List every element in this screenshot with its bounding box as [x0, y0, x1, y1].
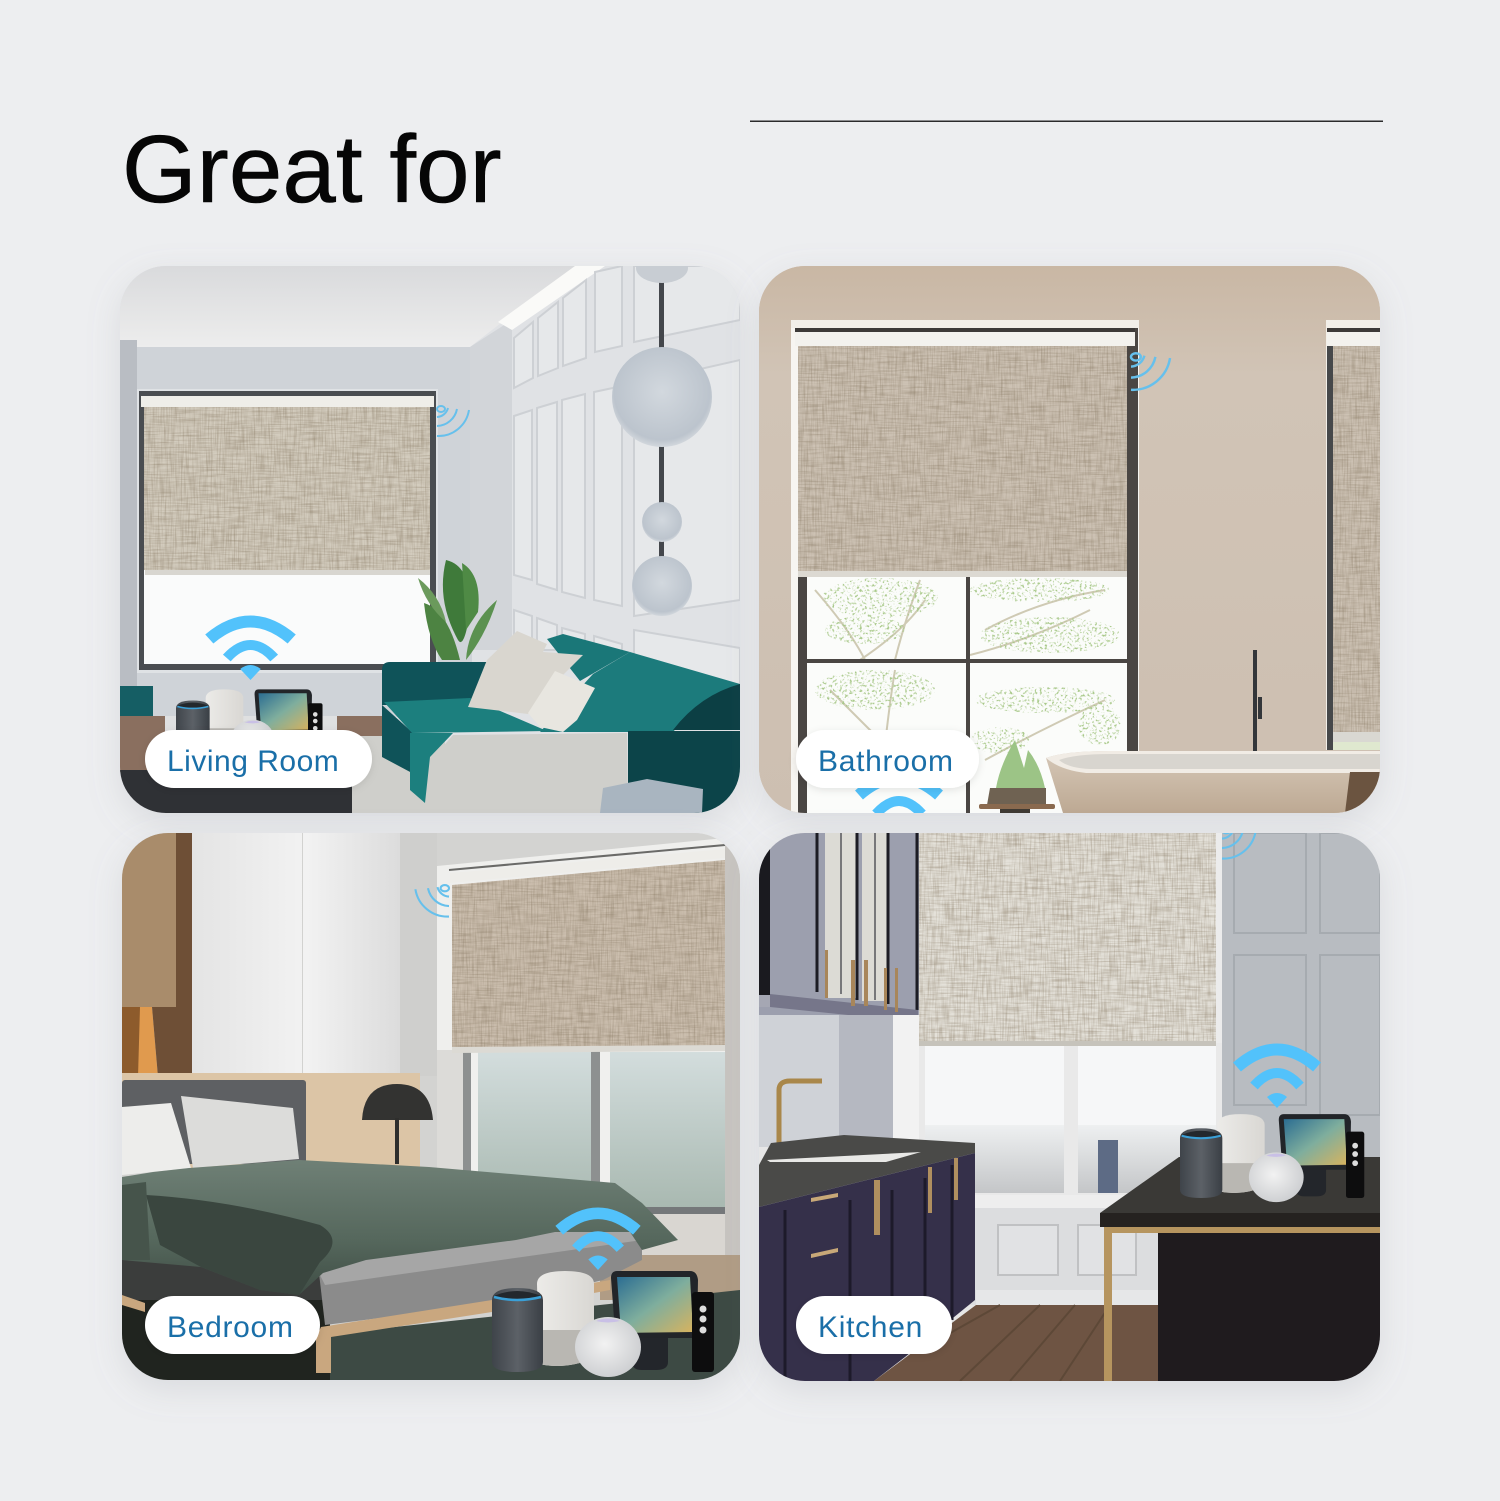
cushions and throw — [445, 631, 628, 813]
panel: kitchen — [759, 827, 1380, 1381]
books — [600, 779, 703, 813]
pendant lamp — [612, 253, 712, 616]
wifi behind label — [855, 788, 943, 813]
island table — [1100, 1157, 1380, 1381]
icon: smart devices — [492, 1271, 714, 1377]
window with shade — [791, 320, 1139, 836]
lower cabinets and counter — [759, 1135, 975, 1381]
icon: wifi — [209, 622, 292, 680]
wall — [759, 266, 1380, 813]
pillows — [122, 1096, 299, 1175]
floor and table — [120, 686, 445, 813]
headboard wall panel — [122, 1073, 420, 1168]
faucet — [779, 1081, 822, 1157]
tree foliage — [815, 578, 1122, 757]
icon: signal arcs — [437, 406, 469, 436]
panel: living room — [120, 253, 740, 813]
panel: bathroom — [759, 266, 1380, 836]
window with shade — [919, 833, 1222, 1195]
plant — [418, 560, 497, 660]
icon: signal arcs — [1222, 833, 1256, 860]
title: Great for — [122, 116, 502, 223]
label: Living Room — [145, 730, 372, 788]
window with shade — [137, 389, 438, 673]
room walls and ceiling — [120, 266, 740, 813]
lamp — [362, 1084, 433, 1164]
upper cabinets — [759, 833, 919, 1015]
label: Bathroom: Bathroom — [818, 745, 954, 778]
label: Bedroom: Bedroom — [167, 1311, 294, 1344]
icon: smart devices — [1180, 1114, 1364, 1202]
label: Bathroom — [796, 730, 979, 788]
floor and rug — [122, 1255, 740, 1380]
label: Kitchen — [796, 1296, 952, 1354]
icon: signal arcs — [415, 885, 449, 917]
bed — [122, 1225, 642, 1373]
tree branches — [815, 580, 1105, 760]
faucet — [1253, 650, 1262, 752]
wooden floor — [874, 1305, 1158, 1381]
walls and wainscot — [759, 833, 1380, 1381]
bathtub — [1046, 751, 1380, 813]
label: Bedroom — [145, 1296, 320, 1354]
sofa — [382, 634, 740, 813]
duvet — [122, 1160, 678, 1295]
icon: signal arcs — [1131, 353, 1170, 390]
label: Living Room: Living Room — [167, 745, 339, 778]
icon: wifi — [559, 1213, 637, 1270]
label: Kitchen: Kitchen — [818, 1311, 923, 1344]
icon: wifi — [1237, 1050, 1317, 1108]
panel: bedroom — [122, 833, 740, 1380]
plant in window — [996, 740, 1045, 788]
window with shade — [437, 839, 726, 1214]
stool with towels — [979, 788, 1055, 813]
header rule — [750, 120, 1383, 122]
walls — [122, 833, 740, 1255]
second window — [1326, 320, 1380, 750]
icon: smart devices — [176, 689, 323, 730]
